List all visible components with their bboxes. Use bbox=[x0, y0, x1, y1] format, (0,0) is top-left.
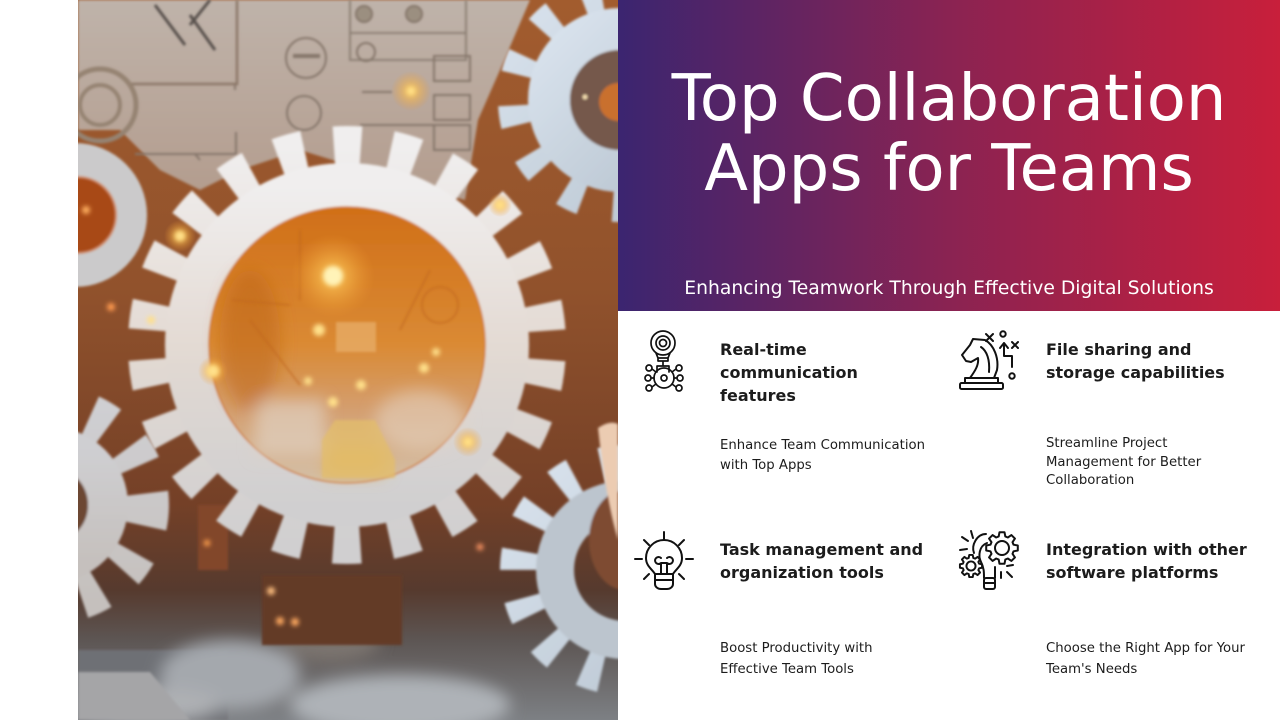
bottom fog and machinery bbox=[78, 505, 510, 720]
description: Effective Team Tools bbox=[720, 662, 854, 677]
item: integration bbox=[958, 530, 1247, 677]
heading: File sharing and bbox=[1046, 340, 1191, 359]
heading bbox=[1046, 340, 1225, 382]
glowing sparks bbox=[164, 71, 512, 457]
icon: lightbulb with gears bbox=[958, 530, 1019, 590]
heading bbox=[720, 540, 923, 582]
heading: Real-time bbox=[720, 340, 807, 359]
item: task management bbox=[634, 531, 923, 677]
core interior details bbox=[220, 270, 465, 475]
heading: Integration with other bbox=[1046, 540, 1247, 559]
title: Apps for Teams bbox=[704, 132, 1194, 206]
main gear bbox=[149, 147, 545, 543]
description bbox=[720, 641, 872, 677]
heading: features bbox=[720, 386, 796, 405]
description: Enhance Team Communication bbox=[720, 438, 925, 453]
side gear bottom left bbox=[0, 408, 147, 602]
heading: organization tools bbox=[720, 563, 884, 582]
description: Team's Needs bbox=[1046, 662, 1137, 677]
description: Boost Productivity with bbox=[720, 641, 872, 656]
description: Management for Better bbox=[1046, 454, 1201, 470]
title bbox=[671, 62, 1226, 206]
heading: Task management and bbox=[720, 540, 923, 559]
heading bbox=[720, 340, 858, 405]
heading: communication bbox=[720, 363, 858, 382]
header banner bbox=[618, 0, 1280, 311]
side gear left bbox=[3, 143, 147, 287]
description: Choose the Right App for Your bbox=[1046, 641, 1245, 656]
top machinery details bbox=[64, 0, 470, 160]
item: file sharing bbox=[959, 330, 1225, 488]
icon: lightbulb bbox=[634, 531, 694, 590]
description: Streamline Project bbox=[1046, 436, 1167, 451]
title: Top Collaboration bbox=[672, 62, 1226, 136]
side gear bottom right bbox=[519, 464, 731, 676]
description: Collaboration bbox=[1046, 473, 1134, 488]
subtitle: Enhancing Teamwork Through Effective Digital Solutions bbox=[684, 278, 1214, 299]
photo: white gears with glowing orange centre bbox=[78, 0, 618, 720]
heading bbox=[1046, 540, 1247, 582]
icon: lightbulb with circuit bbox=[644, 330, 684, 392]
item: real-time communication bbox=[644, 330, 925, 473]
heading: storage capabilities bbox=[1046, 363, 1225, 382]
description: with Top Apps bbox=[720, 458, 812, 473]
description bbox=[1046, 436, 1202, 488]
icon: chess knight strategy bbox=[959, 330, 1019, 390]
beige machinery backdrop bbox=[78, 0, 530, 200]
description bbox=[1046, 641, 1245, 677]
heading: software platforms bbox=[1046, 563, 1218, 582]
description bbox=[720, 438, 925, 473]
hand at right edge bbox=[598, 423, 618, 540]
side gear top right bbox=[514, 0, 726, 206]
